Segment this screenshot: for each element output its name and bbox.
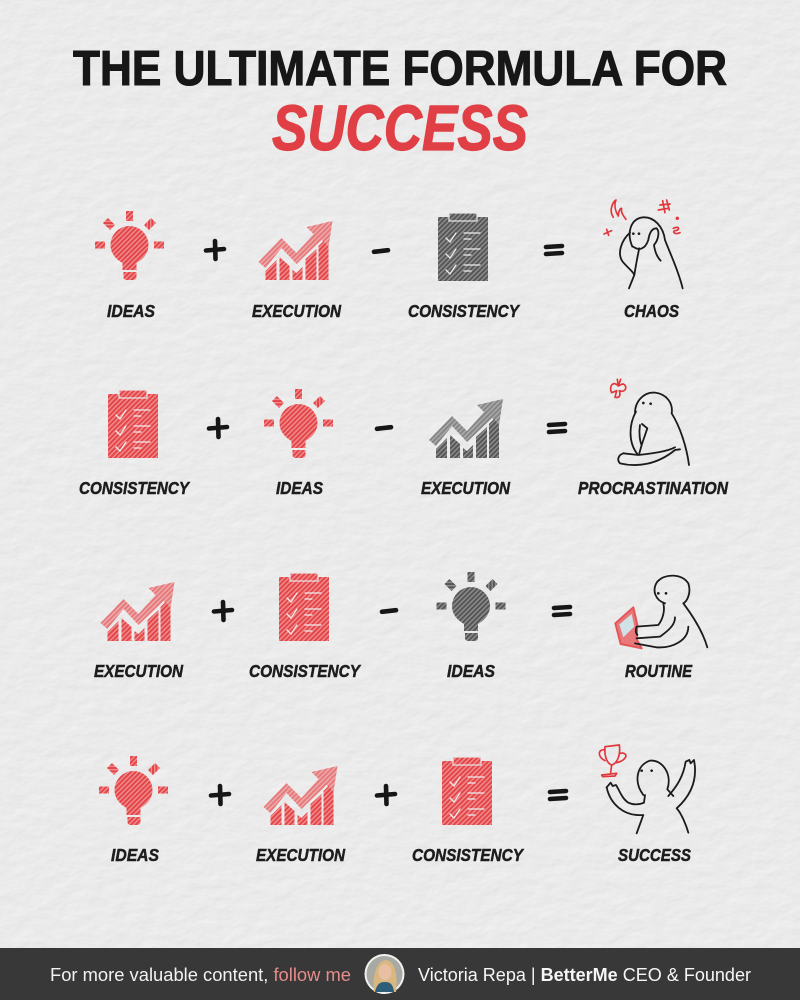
formula row 1: chaos bbox=[95, 200, 683, 321]
label: procrastination: PROCRASTINATION bbox=[578, 478, 728, 498]
footer bar bbox=[0, 948, 800, 1000]
label: ideas: IDEAS bbox=[107, 301, 155, 321]
footer text: call to action: For more valuable content, follow me bbox=[50, 965, 351, 985]
label: success: SUCCESS bbox=[618, 845, 691, 865]
label: ideas: IDEAS bbox=[111, 845, 159, 865]
operator: equals bbox=[549, 424, 565, 432]
label: execution: EXECUTION bbox=[421, 478, 510, 498]
title bbox=[73, 42, 727, 164]
operator: equals bbox=[546, 246, 562, 254]
operator: equals bbox=[550, 791, 566, 799]
formula row 3: routine bbox=[94, 572, 707, 681]
operator: minus bbox=[382, 610, 396, 612]
operator: equals bbox=[554, 607, 570, 615]
label: routine: ROUTINE bbox=[625, 661, 693, 681]
icon: growth chart red bbox=[264, 766, 338, 825]
icon: clipboard red bbox=[442, 757, 492, 825]
operator: minus bbox=[377, 427, 391, 429]
label: consistency: CONSISTENCY bbox=[408, 301, 520, 321]
icon: light bulb red bbox=[95, 211, 164, 280]
operator: minus bbox=[374, 250, 388, 252]
title: SUCCESS bbox=[272, 92, 528, 164]
icon: light bulb red bbox=[264, 389, 333, 458]
label: ideas: IDEAS bbox=[447, 661, 495, 681]
label: execution: EXECUTION bbox=[256, 845, 345, 865]
formula row 4: success bbox=[99, 745, 695, 865]
icon: clipboard red bbox=[108, 390, 158, 458]
label: execution: EXECUTION bbox=[94, 661, 183, 681]
avatar portrait bbox=[364, 954, 404, 994]
operator: plus bbox=[214, 602, 232, 620]
icon: clipboard red bbox=[279, 573, 329, 641]
label: execution: EXECUTION bbox=[252, 301, 341, 321]
illustration: chaos character bbox=[604, 200, 683, 288]
label: chaos: CHAOS bbox=[624, 301, 679, 321]
title: THE ULTIMATE FORMULA FOR bbox=[73, 42, 727, 96]
icon: clipboard grey bbox=[438, 213, 488, 281]
operator: plus bbox=[211, 786, 229, 804]
label: ideas: IDEAS bbox=[276, 478, 323, 498]
illustration: procrastination character bbox=[611, 379, 689, 465]
icon: light bulb red bbox=[99, 756, 168, 825]
operator: plus bbox=[206, 241, 224, 259]
footer text: author: Victoria Repa | BetterMe CEO & Founder bbox=[418, 965, 751, 985]
icon: growth chart red bbox=[100, 582, 174, 641]
formula row 2: procrastination bbox=[79, 379, 728, 498]
illustration: routine character with laptop bbox=[615, 576, 707, 648]
label: consistency: CONSISTENCY bbox=[412, 845, 524, 865]
illustration: success character with trophy bbox=[599, 745, 695, 833]
operator: plus bbox=[377, 786, 395, 804]
operator: plus bbox=[209, 419, 227, 437]
icon: growth chart grey bbox=[429, 399, 503, 458]
icon: light bulb grey bbox=[436, 572, 506, 641]
icon: growth chart red bbox=[258, 221, 332, 280]
label: consistency: CONSISTENCY bbox=[79, 478, 190, 498]
label: consistency: CONSISTENCY bbox=[249, 661, 361, 681]
